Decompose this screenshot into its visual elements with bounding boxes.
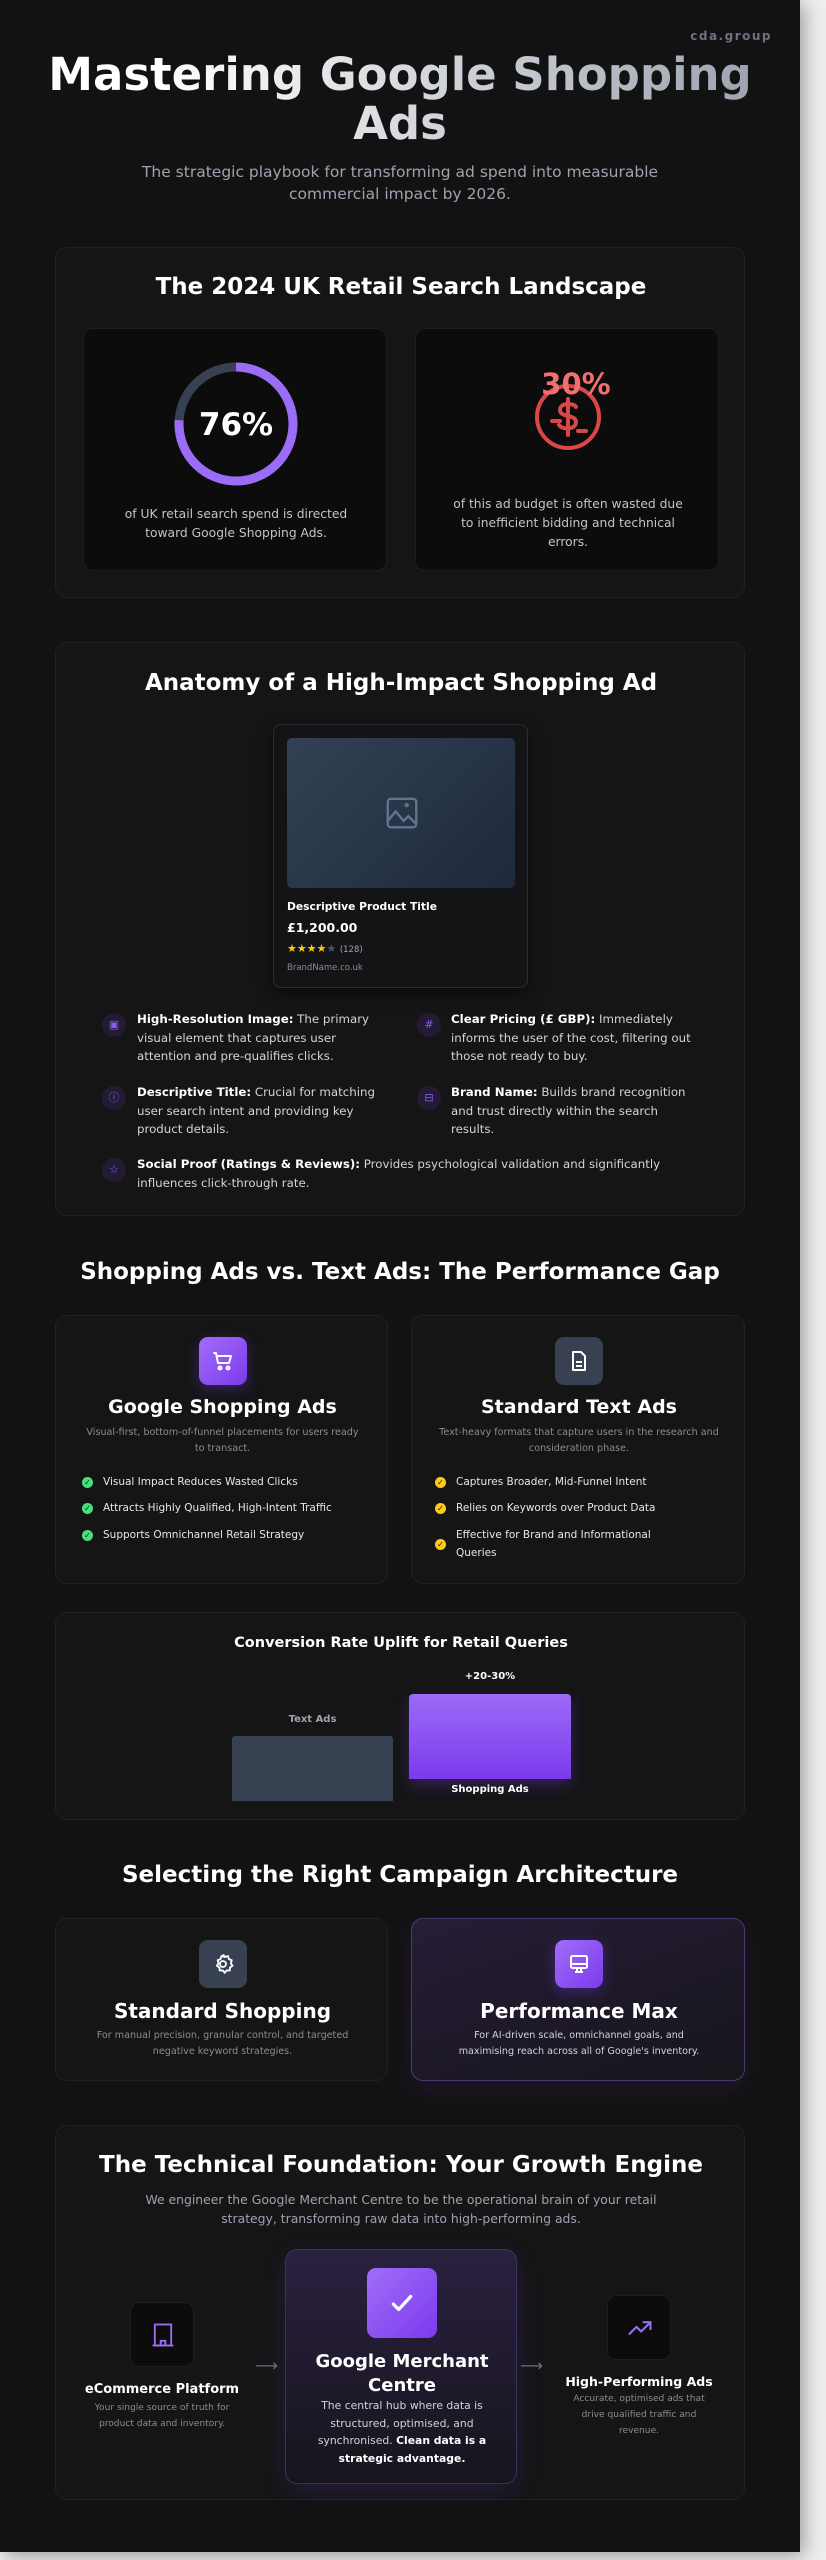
list: Captures Broader, Mid-Funnel Intent [456, 1476, 646, 1488]
feature: image: ▣ [109, 1018, 119, 1031]
icon: document [555, 1337, 603, 1385]
stat card: 76% [83, 328, 387, 571]
feature: brand: Brand Name: Builds brand recognition and trust directly within the search results. [451, 1085, 686, 1136]
donut chart: 76% [199, 407, 273, 443]
stars: ★★★★★ (128) [287, 942, 363, 955]
list: Supports Omnichannel Retail Strategy [103, 1529, 304, 1541]
card: google shopping ads [55, 1315, 388, 1584]
panel: conversion chart [55, 1612, 745, 1820]
title: Mastering Google Shopping [48, 48, 752, 101]
feature: pricing: Clear Pricing (£ GBP): Immediately informs the user of the cost, filtering out those not ready to buy. [451, 1012, 691, 1063]
list: ✓ [437, 1504, 444, 1513]
icon: gear [199, 1940, 247, 1988]
desc: The central hub where data is structured, optimised, and synchronised. Clean data is a strategic advantage. [318, 2399, 486, 2464]
bar chart: Shopping Ads [451, 1784, 529, 1795]
node: high-performing ads [565, 2295, 713, 2436]
arrow: ⟶ [520, 2356, 543, 2375]
label: High-Performing Ads [565, 2374, 713, 2389]
list [435, 1476, 656, 1559]
feature: social proof: ☆ [109, 1163, 119, 1176]
list: ✓ [437, 1478, 444, 1487]
panel: anatomy [55, 642, 745, 1216]
brand: cda.group [690, 29, 772, 43]
icon: building [130, 2302, 194, 2367]
heading: campaign architecture: Selecting the Right Campaign Architecture [122, 1862, 678, 1888]
price: £1,200.00 [287, 920, 357, 935]
image placeholder [287, 738, 515, 888]
stat 30%: 30% [541, 367, 611, 401]
list: Relies on Keywords over Product Data [456, 1502, 656, 1514]
icon: check [367, 2268, 437, 2338]
panel: technical foundation [55, 2125, 745, 2500]
bar chart [232, 1671, 578, 1801]
label: eCommerce Platform [85, 2382, 239, 2397]
heading: The 2024 UK Retail Search Landscape [156, 274, 646, 300]
bar: text ads: Text Ads [289, 1714, 336, 1725]
subtitle: We engineer the Google Merchant Centre to be the operational brain of your retail strategy, transforming raw data into high-performing ads. [145, 2192, 657, 2226]
title [0, 50, 800, 148]
chart title: Conversion Rate Uplift for Retail Queries [234, 1635, 568, 1651]
desc: maximising reach across all of Google's inventory. [459, 2046, 699, 2057]
icon: cart [199, 1337, 247, 1385]
title: Performance Max [480, 1999, 678, 2023]
icon: dollar [535, 384, 601, 450]
desc: For AI-driven scale, omnichannel goals, and [474, 2030, 684, 2041]
panel: landscape [55, 247, 745, 598]
feature: image: High-Resolution Image: The primary visual element that captures user attention and pre-qualifies clicks. [137, 1012, 369, 1063]
list: Attracts Highly Qualified, High-Intent Traffic [103, 1502, 332, 1514]
caption: of UK retail search spend is directed toward Google Shopping Ads. [125, 507, 347, 540]
desc [459, 2030, 699, 2057]
product title: Descriptive Product Title [287, 900, 437, 913]
feature: title: Descriptive Title: Crucial for matching user search intent and providing key product details. [137, 1085, 375, 1136]
card title: Google Shopping Ads [108, 1396, 337, 1418]
card: standard shopping [55, 1918, 388, 2081]
feature: brand: ⊟ [424, 1091, 434, 1104]
list: ✓ [84, 1504, 91, 1513]
stat card: 30% [415, 328, 719, 571]
feature: social proof: Social Proof (Ratings & Reviews): Provides psychological validation and significantly influences click-through rate. [137, 1157, 660, 1190]
list: ✓ [437, 1540, 444, 1549]
icon: monitor [555, 1940, 603, 1988]
node: ecommerce: Your single source of truth for product data and inventory. [95, 2403, 229, 2429]
list: Visual Impact Reduces Wasted Clicks [103, 1476, 298, 1488]
card title: Standard Text Ads [481, 1396, 677, 1418]
product card [273, 724, 528, 988]
icon: trend [607, 2295, 671, 2360]
node: high-performing ads: Accurate, optimised ads that drive qualified traffic and revenue. [573, 2394, 705, 2436]
heading: Anatomy of a High-Impact Shopping Ad [145, 670, 657, 696]
node: merchant centre [285, 2249, 517, 2484]
caption: of this ad budget is often wasted due to inefficient bidding and technical errors. [453, 497, 683, 549]
node: ecommerce [85, 2302, 239, 2429]
heading: performance gap: Shopping Ads vs. Text Ads: The Performance Gap [80, 1259, 720, 1285]
list: ✓ [84, 1531, 91, 1540]
list [82, 1476, 332, 1541]
title: Google Merchant Centre [315, 2351, 489, 2396]
title: Standard Shopping [114, 1999, 331, 2023]
subtitle: The strategic playbook for transforming ad spend into measurable commercial impact by 2026. [142, 163, 658, 203]
brand url: BrandName.co.uk [287, 963, 363, 973]
card: performance max [411, 1918, 745, 2081]
heading: The Technical Foundation: Your Growth Engine [99, 2152, 703, 2178]
desc: Visual-first, bottom-of-funnel placements for users ready to transact. [86, 1427, 359, 1454]
feature: pricing: # [424, 1018, 434, 1031]
card: standard text ads [411, 1315, 745, 1584]
title: Ads [353, 97, 447, 150]
donut chart [174, 362, 298, 486]
feature: title: ⓘ [108, 1091, 120, 1104]
list: ✓ [84, 1478, 91, 1487]
desc: Text-heavy formats that capture users in the research and consideration phase. [439, 1427, 719, 1454]
desc: For manual precision, granular control, and targeted negative keyword strategies. [97, 2030, 348, 2057]
arrow: ⟶ [255, 2356, 278, 2375]
list: Effective for Brand and Informational Queries [456, 1529, 651, 1559]
bar: shopping ads: +20-30% [465, 1671, 515, 1682]
